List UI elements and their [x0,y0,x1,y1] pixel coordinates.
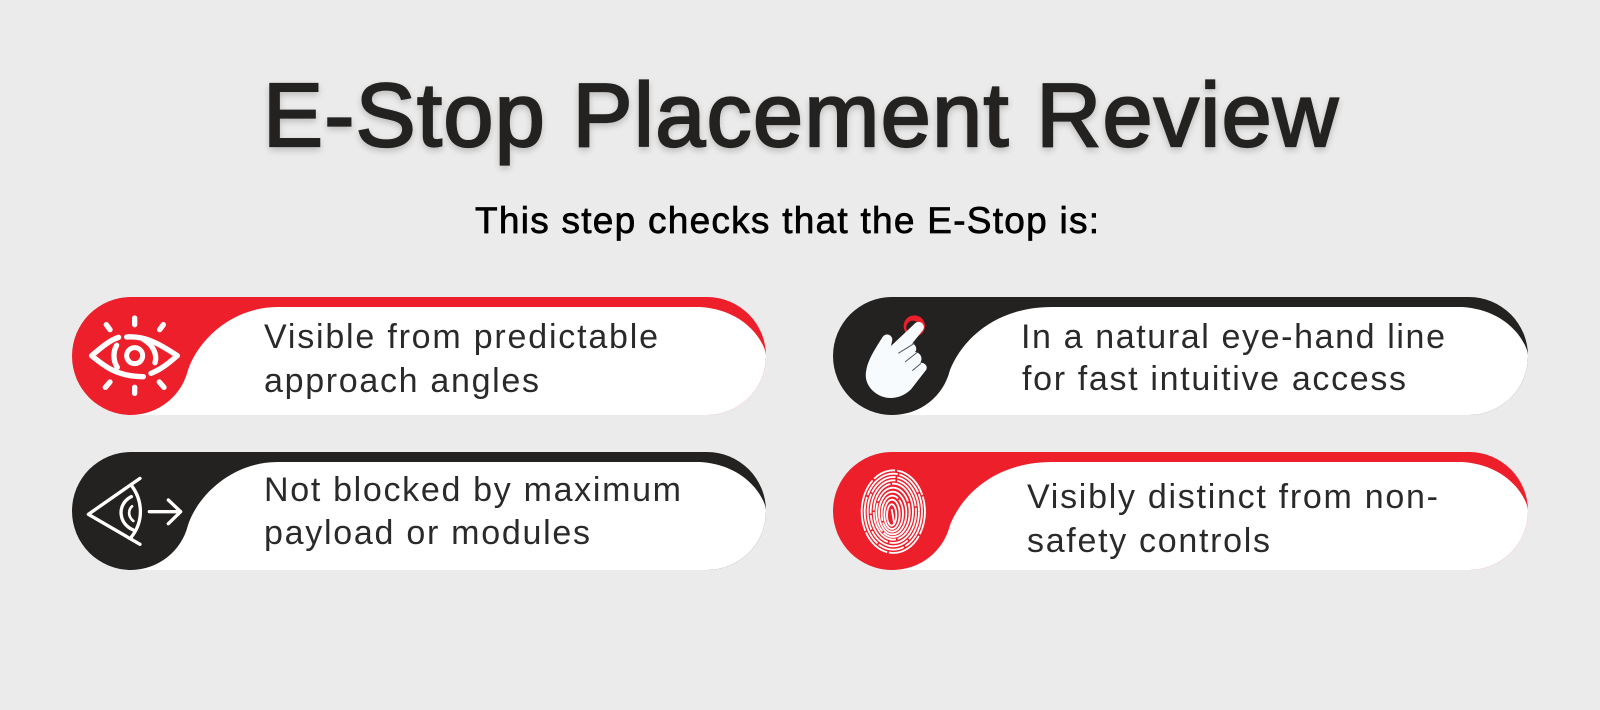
pill white body [131,462,766,570]
pill white body [892,462,1528,570]
text: visible from predictable approach angles: approach angles [264,362,539,400]
panel: not blocked by payload [72,452,766,570]
panel: visibly distinct controls [833,452,1528,570]
icon: eye looking right with arrow [88,478,181,544]
pill background black [833,297,1528,415]
icon: eye with rays [92,318,177,393]
text: natural eye-hand line for fast intuitive access: In a natural eye-hand line [1021,318,1445,356]
pill background red [833,452,1528,570]
pill background black [72,452,766,570]
subtitle: This step checks that the E-Stop is: [475,200,1099,241]
text: not blocked by maximum payload or modules: Not blocked by maximum [264,471,681,509]
icon: hand pressing button [866,315,927,398]
text: not blocked by maximum payload or modules: payload or modules [264,514,590,552]
title: E-Stop Placement Review [263,69,1339,169]
text: visible from predictable approach angles: Visible from predictable [264,318,658,356]
pill white body [892,307,1528,415]
panel: visible from approach angles [72,297,766,415]
pill white body [131,307,766,415]
pill background red [72,297,766,415]
icon: fingerprint [862,470,925,553]
title: E-Stop Placement Review [263,66,1339,166]
text: not blocked by maximum payload or modules [264,471,681,552]
panel: natural eye-hand line [833,297,1528,415]
text: visibly distinct from non-safety controls [1027,478,1438,560]
text: natural eye-hand line for fast intuitive access [1021,318,1445,398]
text: natural eye-hand line for fast intuitive access: for fast intuitive access [1022,360,1406,398]
text: visibly distinct from non-safety controls: safety controls [1027,522,1270,560]
text: visible from predictable approach angles [264,318,658,400]
text: visibly distinct from non-safety controls: Visibly distinct from non- [1027,478,1438,516]
